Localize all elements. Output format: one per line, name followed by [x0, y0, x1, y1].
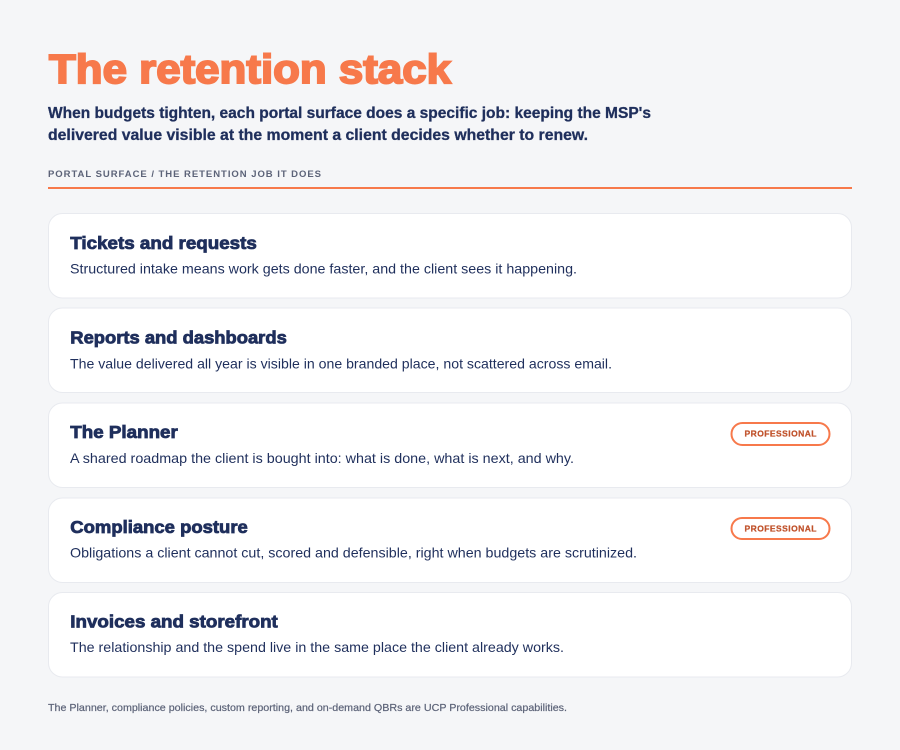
badge: professional: [732, 423, 830, 445]
badge: professional: [732, 518, 830, 539]
panel: invoices and storefront: [48, 592, 852, 677]
title: The retention stack: [49, 46, 452, 92]
panel: the planner: [48, 403, 852, 488]
footnote: The Planner, compliance policies, custom reporting, and on-demand QBRs are UCP Professional capabilities.: [48, 703, 567, 714]
card text: reports: The value delivered all year is visible in one branded place, not scattered across email.: [70, 355, 612, 371]
card heading: tickets: Tickets and requests: [70, 233, 257, 253]
subtitle: delivered value visible at the moment a client decides whether to renew.: [48, 127, 588, 144]
panel: reports and dashboards: [48, 308, 852, 392]
card heading: invoices: Invoices and storefront: [70, 612, 278, 632]
subtitle: When budgets tighten, each portal surface does a specific job: keeping the MSP's: [48, 105, 651, 122]
subtitle: [48, 105, 651, 144]
card heading: planner: The Planner: [70, 422, 178, 442]
column label: PORTAL SURFACE / THE RETENTION JOB IT DOES: [48, 169, 321, 180]
badge: professional: PROFESSIONAL: [744, 524, 816, 534]
badge: professional: PROFESSIONAL: [744, 428, 816, 438]
card heading: reports: Reports and dashboards: [70, 328, 287, 348]
panel: compliance posture: [48, 498, 852, 582]
card text: planner: A shared roadmap the client is bought into: what is done, what is next, and why.: [70, 450, 574, 466]
card text: invoices: The relationship and the spend live in the same place the client already works.: [70, 639, 564, 655]
panel: tickets and requests: [48, 214, 852, 298]
card text: tickets: Structured intake means work gets done faster, and the client sees it happening.: [70, 260, 577, 276]
card text: compliance: Obligations a client cannot cut, scored and defensible, right when budgets are scrutinized.: [70, 544, 637, 560]
card heading: compliance: Compliance posture: [70, 517, 248, 537]
